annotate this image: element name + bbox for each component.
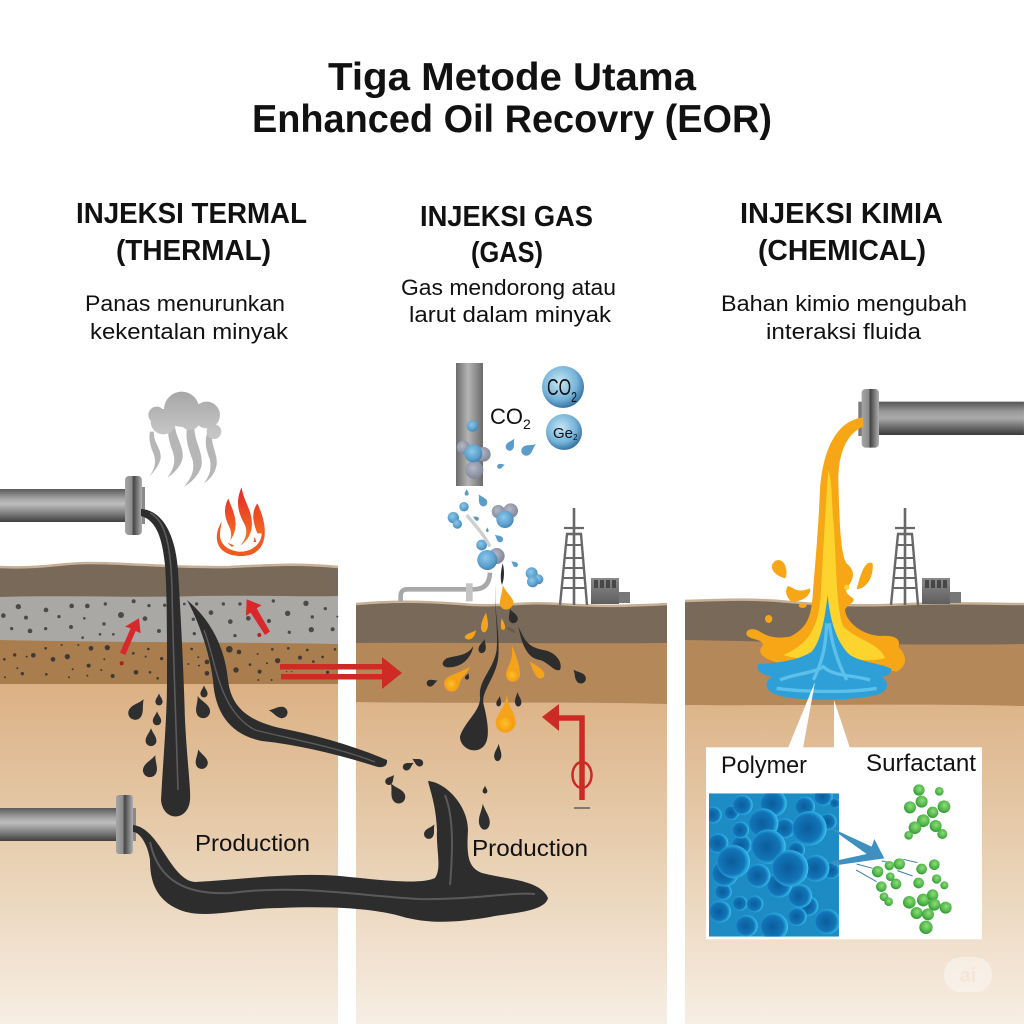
title: Tiga Metode Utama: [328, 56, 696, 99]
heading: thermal: INJEKSI TERMAL: [76, 198, 307, 230]
rock grains: brown layer: [3, 644, 336, 681]
text: thermal description: kekentalan minyak: [90, 319, 289, 344]
yellow highlight: [783, 470, 885, 660]
icon: CO2 molecule badge: [542, 366, 584, 408]
surfactant molecules: [872, 784, 952, 934]
heading: gas: INJEKSI GAS: [420, 201, 593, 233]
arrow: red return with valve: [542, 704, 592, 808]
text: gas description: Gas mendorong atau: [401, 275, 616, 300]
arrows: heat rising: [120, 599, 270, 655]
oil: production pool: [133, 781, 548, 922]
blue arrow: [828, 827, 884, 866]
orange oil droplets: gas panel: [444, 585, 544, 733]
label: Surfactant: Surfactant: [866, 750, 976, 777]
pipe: chemical injection: [858, 389, 1024, 448]
icon: steam cloud: [148, 392, 221, 487]
panel: thermal ground layers: [0, 563, 338, 1024]
heading: chemical: [740, 198, 943, 267]
heading: chemical: INJEKSI KIMIA: [740, 198, 943, 230]
pipe: thermal injection: [0, 476, 145, 535]
label: Polymer: Polymer: [721, 752, 807, 779]
text: thermal description: Panas menurunkan: [85, 291, 285, 316]
panel: chemical ground layers: [685, 600, 1024, 1024]
oil droplets: [126, 685, 490, 841]
icon: oil rig, gas panel: [560, 508, 630, 605]
text: thermal description: [85, 291, 289, 344]
heading: gas: [420, 201, 593, 269]
pipe: surface gas line with valve: [401, 573, 490, 602]
heading: gas: (GAS): [471, 237, 543, 269]
icon: flame: [217, 487, 265, 556]
label: production 1: Production: [195, 830, 310, 856]
panel: polymer and surfactant callout: [705, 747, 982, 941]
pipe: gas injection: [456, 363, 483, 486]
oil: branch stream: [187, 600, 387, 767]
oil: injection stream: [141, 509, 190, 816]
text: chemical description: [721, 291, 967, 344]
icon: Ge2 molecule badge: Ge: [553, 425, 573, 442]
text: gas description: larut dalam minyak: [409, 302, 612, 327]
watermark: ai badge: [944, 957, 992, 992]
label: CO2: CO: [490, 404, 523, 429]
label: production 2: Production: [472, 835, 588, 861]
panel: gas ground layers: [356, 602, 667, 1024]
heading: chemical: (CHEMICAL): [758, 235, 926, 267]
blue water pool: [757, 595, 892, 700]
icon: Ge2 molecule badge: 2: [573, 433, 578, 442]
icon: CO2 molecule badge: 2: [571, 389, 577, 406]
water highlights: [777, 623, 877, 691]
splash drops: [765, 560, 873, 623]
rock grains: grey layer: [1, 599, 338, 639]
chemical pour and splash: [746, 417, 905, 700]
gas bubbles and droplets: [448, 420, 543, 587]
watermark: ai badge: ai: [960, 965, 976, 987]
icon: CO2 molecule badge: CO: [547, 374, 582, 400]
callout pointers: [788, 682, 850, 748]
polymer micrograph: [705, 787, 840, 941]
title: Enhanced Oil Recovry (EOR): [252, 98, 772, 141]
label: CO2: 2: [523, 416, 531, 432]
icon: Ge2 molecule badge: [546, 414, 582, 450]
orange chemical stream: [746, 417, 905, 672]
pipe: production: [0, 795, 136, 854]
icon: oil rig, chemical panel: [891, 508, 961, 605]
heading: thermal: [76, 198, 307, 267]
title: [252, 56, 772, 141]
text: chemical description: interaksi fluida: [766, 319, 922, 344]
oil fingers: gas panel: [426, 563, 588, 761]
text: chemical description: Bahan kimio mengubah: [721, 291, 967, 316]
heading: thermal: (THERMAL): [116, 235, 271, 267]
arrow: double red arrow: [280, 657, 402, 689]
text: gas description: [401, 275, 616, 327]
streak lines: [856, 859, 917, 882]
